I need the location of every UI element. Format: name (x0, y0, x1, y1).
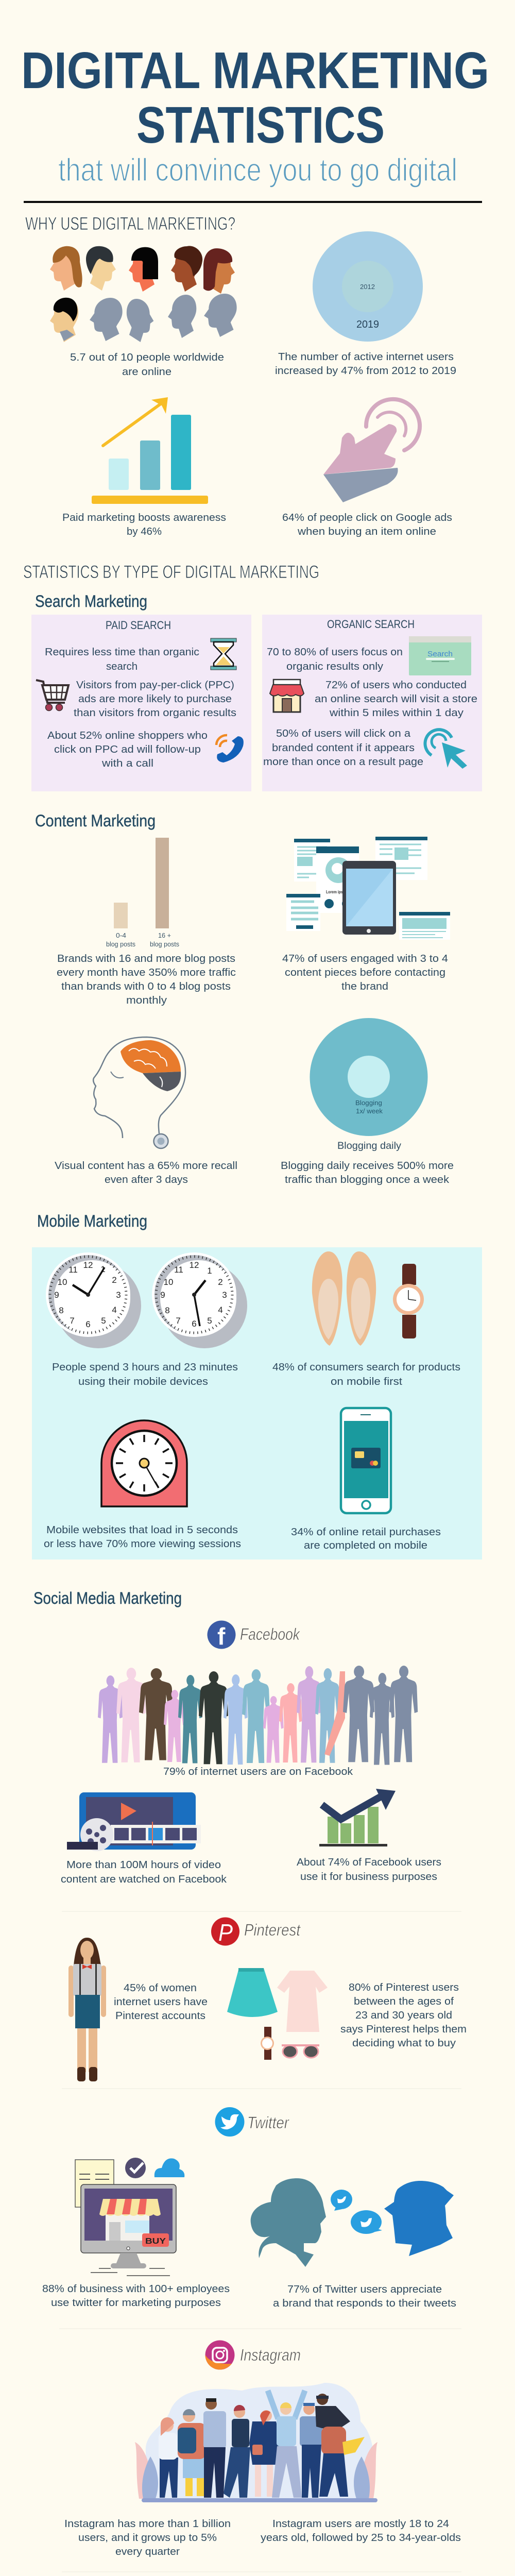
text: recall stat: Visual content has a 65% more recall (55, 1160, 237, 1172)
stat: ppc visitors (74, 680, 236, 719)
text: time on mobile: using their mobile devices (78, 1376, 208, 1387)
stat: follow-up call: About 52% online shoppers who (47, 730, 208, 741)
text: twitter business: 88% of business with 100+ employees (42, 2283, 230, 2295)
icon: clock one: 1 (100, 1264, 106, 1274)
icon: content pieces and tablet (286, 837, 450, 940)
text: load time (44, 1524, 241, 1550)
stat: ppc visitors: ads are more likely to purchase (78, 693, 232, 705)
icon: talking heads (251, 2178, 454, 2267)
heading: search marketing: Search Marketing (35, 592, 147, 611)
chart: rising bars with arrow (92, 397, 208, 504)
text: instagram ages: years old, followed by 25 to 34-year-olds (261, 2532, 461, 2544)
text: online stat (70, 352, 224, 378)
icon: group of friends (135, 2383, 377, 2502)
icon: clock two: 12 (190, 1260, 199, 1270)
stat: branded content: branded content if it appears (272, 742, 415, 754)
platform: pinterest (211, 1918, 301, 1946)
heading: mobile marketing: Mobile Marketing (37, 1212, 147, 1230)
text: purchases (291, 1527, 441, 1551)
panel: mobile marketing (32, 1247, 482, 1560)
text: search on mobile: on mobile first (331, 1376, 402, 1387)
text: recall stat (55, 1160, 237, 1185)
stat: organic focus (267, 647, 403, 672)
icon: clock two: 10 (164, 1277, 173, 1287)
title: STATISTICS (136, 96, 385, 154)
text: load time: Mobile websites that load in 5 seconds (46, 1524, 238, 1536)
panel: organic search (262, 615, 482, 791)
text: fb video hours: More than 100M hours of video (66, 1859, 221, 1871)
icon: cart (36, 680, 68, 711)
icon: clock one: 8 (59, 1306, 64, 1315)
text: paid awareness: Paid marketing boosts awareness (62, 512, 226, 523)
text: blog traffic stat: than brands with 0 to 4 blog posts (61, 981, 231, 992)
chart: blogging circles: Blogging daily (337, 1141, 402, 1151)
text: content pieces stat (282, 953, 448, 992)
stat: branded content: 50% of users will click on a (276, 728, 411, 739)
text: paid awareness: by 46% (127, 526, 162, 537)
icon: shoes (312, 1251, 376, 1346)
text: pinterest women (114, 1982, 208, 2022)
icon: clock one (46, 1252, 141, 1348)
text: google ads (282, 512, 452, 537)
text: fb business: use it for business purposes (300, 1871, 437, 1883)
platform: facebook (207, 1621, 301, 1650)
icon: clock two: 9 (160, 1290, 165, 1300)
text: blogging stat: traffic than blogging once a week (285, 1174, 450, 1185)
text: search on mobile (272, 1362, 460, 1387)
chart: internet users circles: 2019 (356, 319, 379, 330)
chart: blogging circles: 1x/ week (356, 1107, 383, 1115)
icon: clock one: 7 (70, 1316, 75, 1326)
text: twitter brand (273, 2284, 456, 2309)
icon: clock two: 6 (192, 1319, 197, 1329)
stat: less time: Requires less time than organic (45, 647, 199, 658)
stat: ppc visitors: Visitors from pay-per-click (PPC) (76, 680, 234, 691)
text: online stat: 5.7 out of 10 people worldwide (70, 352, 224, 363)
platform: instagram (205, 2340, 301, 2370)
platform: instagram: Instagram (240, 2346, 301, 2364)
text: twitter business (42, 2283, 230, 2309)
icon: search browser: Search (427, 650, 453, 658)
text: pinterest women: 45% of women (124, 1982, 197, 1994)
heading: content marketing: Content Marketing (35, 811, 156, 830)
platform: pinterest: Pinterest (244, 1921, 301, 1939)
icon: clock two: 5 (207, 1316, 212, 1326)
text: search on mobile: 48% of consumers search for products (272, 1362, 460, 1373)
icon: clock one: 11 (68, 1265, 78, 1275)
icon: cursor (425, 730, 467, 769)
stat: less time: search (106, 661, 138, 672)
stat: organic focus: organic results only (286, 661, 383, 672)
text: time on mobile: People spend 3 hours and 23 minutes (52, 1362, 238, 1373)
icon: store (270, 680, 304, 712)
text: fb users: 79% of internet users are on Facebook (163, 1766, 353, 1777)
title (21, 42, 489, 188)
icon: clock one: 5 (101, 1316, 106, 1326)
stat: follow-up call: with a call (101, 758, 153, 769)
icon: clock one: 12 (83, 1260, 93, 1270)
text: instagram users: users, and it grows up to 5% (78, 2532, 217, 2544)
icon: growth chart (319, 1789, 396, 1846)
stat: follow-up call (47, 730, 208, 769)
text: purchases: are completed on mobile (304, 1540, 427, 1551)
text: fb business: About 74% of Facebook users (297, 1857, 441, 1868)
text: blog traffic stat: every month have 350% more traffic (57, 967, 236, 978)
icon: clock one: 10 (58, 1277, 67, 1287)
chart: blogging circles (310, 1018, 427, 1151)
icon: video film (67, 1792, 201, 1851)
text: content pieces stat: 47% of users engaged with 3 to 4 (282, 953, 448, 964)
text: paid awareness (62, 512, 226, 537)
icon: watch (393, 1264, 424, 1338)
chart: blog post bars (106, 838, 179, 948)
stat: follow-up call: click on PPC ad will follow-up (54, 744, 201, 755)
icon: smartphone with card (341, 1408, 391, 1513)
icon: woman (68, 1938, 106, 2081)
icon: search browser (409, 636, 471, 675)
text: google ads: 64% of people click on Google ads (282, 512, 452, 523)
text: users stat: increased by 47% from 2012 to 2019 (275, 365, 456, 377)
platform: pinterest: P (218, 1919, 233, 1946)
text: fb business (297, 1857, 441, 1883)
icon: clock one: 3 (116, 1290, 121, 1300)
icon: clock two: 1 (207, 1266, 212, 1276)
platform: facebook: f (217, 1623, 226, 1650)
chart: blog post bars: 0-4 (116, 931, 126, 939)
text: twitter business: use twitter for marketing purposes (51, 2297, 221, 2309)
stat: store visit: within 5 miles within 1 day (329, 707, 464, 719)
text: blog traffic stat (57, 953, 236, 1006)
text: users stat: The number of active internet users (278, 351, 454, 363)
icon: crowd of silhouettes (98, 1666, 418, 1765)
platform: twitter (215, 2107, 289, 2137)
chart: blog post bars: blog posts (150, 940, 179, 948)
platform: twitter: Twitter (247, 2113, 289, 2132)
stat: branded content: more than once on a result page (263, 756, 423, 768)
text: pinterest ages: between the ages of (354, 1996, 454, 2007)
icon: online store monitor (75, 2158, 184, 2276)
stat: store visit (315, 680, 477, 719)
icon: online store monitor: BUY (145, 2237, 166, 2246)
text: instagram users: Instagram has more than 1 billion (64, 2518, 231, 2530)
text: pinterest ages: 23 and 30 years old (355, 2010, 452, 2021)
text: content pieces stat: content pieces before contacting (285, 967, 445, 978)
panel heading: ORGANIC SEARCH (327, 618, 415, 631)
text: fb video hours: content are watched on Facebook (61, 1874, 227, 1885)
icon: clock one: 9 (54, 1290, 59, 1300)
stat: store visit: 72% of users who conducted (325, 680, 467, 691)
panel: paid search (31, 615, 251, 791)
icon: clock two: 8 (165, 1306, 170, 1315)
stat: less time (45, 647, 199, 672)
chart: blog post bars: blog posts (106, 940, 135, 948)
icon: clock two (152, 1252, 247, 1348)
heading: social media marketing: Social Media Marketing (33, 1589, 182, 1607)
text: recall stat: even after 3 days (105, 1174, 188, 1185)
panel heading: PAID SEARCH (106, 619, 171, 632)
text: blogging stat: Blogging daily receives 500% more (281, 1160, 454, 1172)
text: purchases: 34% of online retail purchases (291, 1527, 441, 1538)
text: pinterest women: internet users have (114, 1996, 208, 2008)
text: load time: or less have 70% more viewing sessions (44, 1538, 241, 1550)
text: instagram users (64, 2518, 231, 2557)
text: instagram ages: Instagram users are mostly 18 to 24 (272, 2518, 449, 2530)
text: pinterest ages: says Pinterest helps them (340, 2024, 467, 2035)
text: fb video hours (61, 1859, 227, 1885)
text: pinterest ages: deciding what to buy (352, 2038, 456, 2049)
icon: clock one: 6 (85, 1319, 91, 1329)
text: users stat (275, 351, 456, 377)
text: blog traffic stat: monthly (126, 995, 167, 1006)
icon: pointing hand (323, 399, 420, 502)
icon: phone (216, 735, 244, 762)
icon: clock two: 7 (176, 1316, 181, 1326)
chart: internet users circles: 2012 (360, 283, 375, 291)
icon: clock one: 4 (112, 1305, 117, 1315)
icon: head with brain (93, 1037, 185, 1148)
stat: store visit: an online search will visit a store (315, 693, 477, 705)
text: blog traffic stat: Brands with 16 and more blog posts (57, 953, 235, 964)
chart: blogging circles: Blogging (355, 1099, 382, 1107)
stat: organic focus: 70 to 80% of users focus on (267, 647, 403, 658)
text: instagram users: every quarter (115, 2546, 180, 2557)
icon: clock two: 4 (218, 1305, 223, 1315)
icon: ten heads (50, 246, 237, 342)
icon: clock two: 11 (174, 1265, 183, 1275)
text: blogging stat (281, 1160, 454, 1185)
text: instagram ages (261, 2518, 461, 2544)
stat: ppc visitors: than visitors from organic results (74, 707, 236, 719)
text: google ads: when buying an item online (297, 526, 436, 537)
text: twitter brand: a brand that responds to their tweets (273, 2298, 456, 2309)
text: pinterest ages: 80% of Pinterest users (349, 1982, 459, 1993)
chart: blog post bars: 16 + (158, 931, 171, 939)
text: content pieces stat: the brand (341, 981, 388, 992)
text: twitter brand: 77% of Twitter users appreciate (287, 2284, 442, 2295)
icon: hourglass (211, 638, 236, 670)
heading: statistics by type: STATISTICS BY TYPE OF DIGITAL MARKETING (23, 562, 319, 582)
platform: facebook: Facebook (240, 1625, 301, 1643)
icon: fashion items (227, 1968, 328, 2060)
text: online stat: are online (122, 366, 171, 378)
icon: table timer (101, 1420, 187, 1506)
text: pinterest ages (340, 1982, 467, 2049)
chart: internet users circles (313, 231, 423, 342)
text: pinterest women: Pinterest accounts (115, 2010, 205, 2022)
icon: clock two: 3 (222, 1290, 227, 1300)
text: time on mobile (52, 1362, 238, 1387)
icon: clock one: 2 (112, 1275, 117, 1285)
stat: branded content (263, 728, 423, 768)
heading: why use digital marketing: WHY USE DIGITAL MARKETING? (25, 214, 235, 234)
icon: clock two: 2 (218, 1277, 223, 1287)
icon: content pieces and tablet: Lorem ipsum (326, 890, 348, 894)
